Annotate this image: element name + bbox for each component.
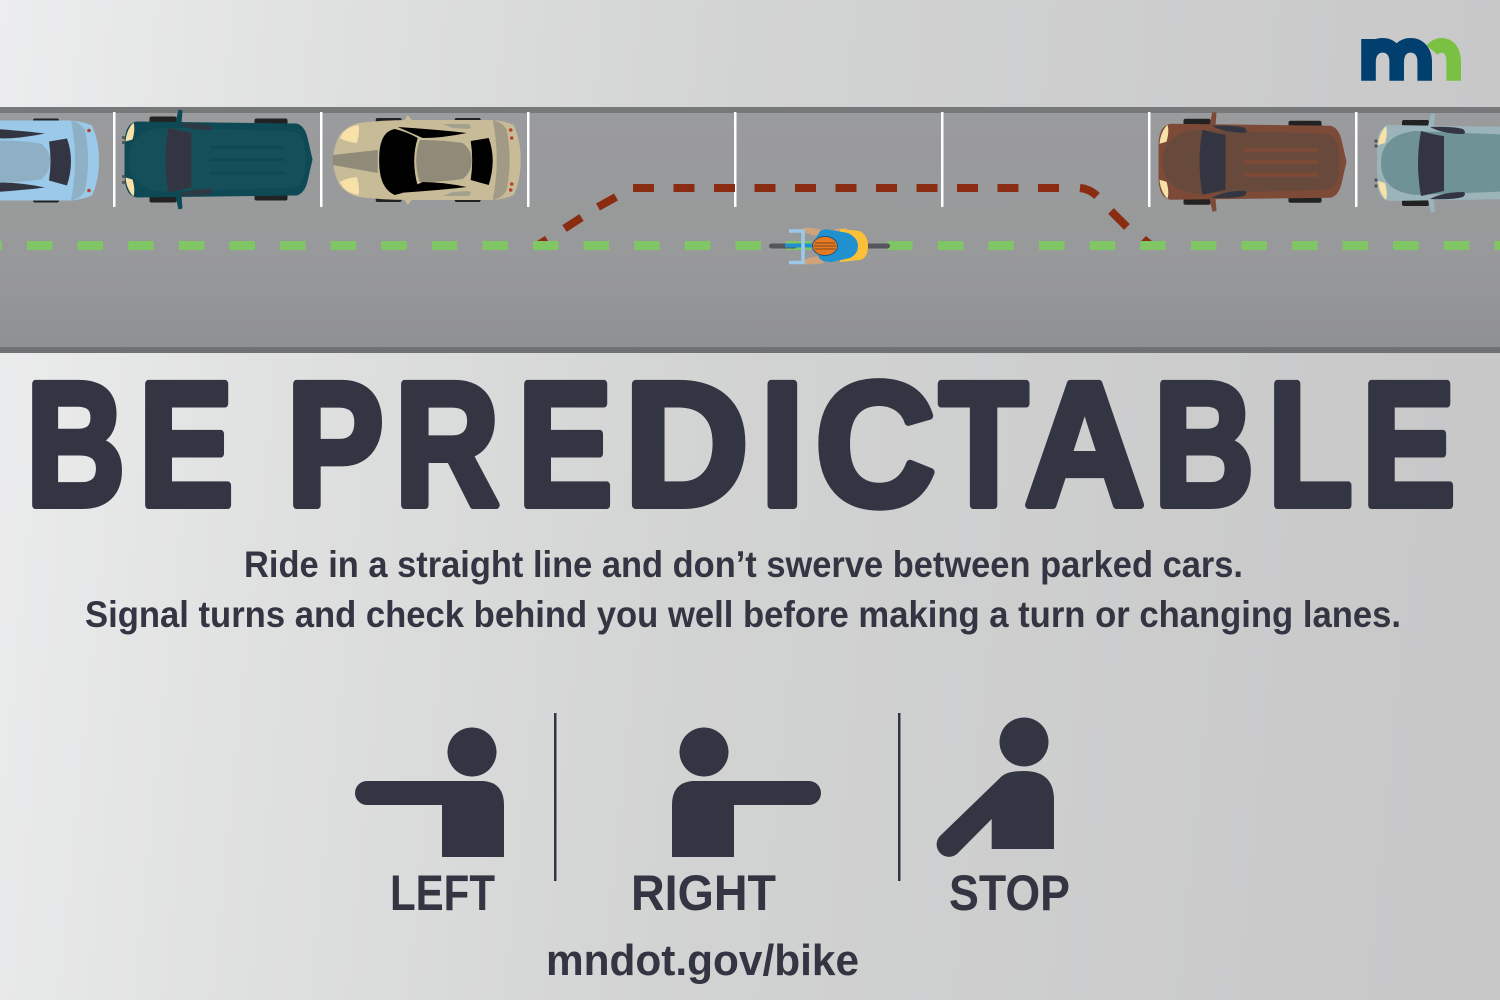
title: BE PREDICTABLE: L [1268,347,1353,543]
icon: right turn signal [672,728,821,857]
parking space lines [113,112,1358,207]
body text [85,544,1401,635]
body text: Ride in a straight line and don’t swerve between parked cars. [244,544,1243,585]
label: RIGHT: RIGHT [631,865,776,921]
title: BE PREDICTABLE: R [395,347,499,543]
divider [554,713,556,881]
title: BE PREDICTABLE: P [287,347,384,543]
icon: left turn signal [355,728,504,857]
green dashed bike lane line [0,246,1500,253]
car: grey-green car [1374,113,1500,213]
title: BE PREDICTABLE: A [1025,347,1145,543]
road [0,107,1500,353]
title: BE PREDICTABLE: E [1362,347,1455,543]
cyclist [769,228,890,264]
car: light blue sports car [0,118,99,202]
title: BE PREDICTABLE: E [139,347,233,543]
icon: stop signal [937,718,1054,857]
label: LEFT: LEFT [390,865,495,921]
title: BE PREDICTABLE: D [624,347,749,543]
car: teal SUV [122,110,313,210]
title: BE PREDICTABLE: C [815,347,935,543]
title: BE PREDICTABLE: T [939,347,1028,543]
title: BE PREDICTABLE: I [761,347,804,543]
divider [898,713,900,881]
title: BE PREDICTABLE: B [1154,347,1254,543]
title: BE PREDICTABLE [26,347,1455,543]
car: brown SUV [1158,112,1346,212]
title: BE PREDICTABLE: E [518,347,612,543]
body text: Signal turns and check behind you well before making a turn or changing lanes. [85,594,1401,635]
red dashed swerving path [537,188,1152,241]
logo: mn [1368,39,1454,81]
title: BE PREDICTABLE: B [26,347,125,543]
car: tan sports car [333,115,521,205]
website url: mndot.gov/bike [546,936,859,985]
label: STOP: STOP [949,865,1070,921]
